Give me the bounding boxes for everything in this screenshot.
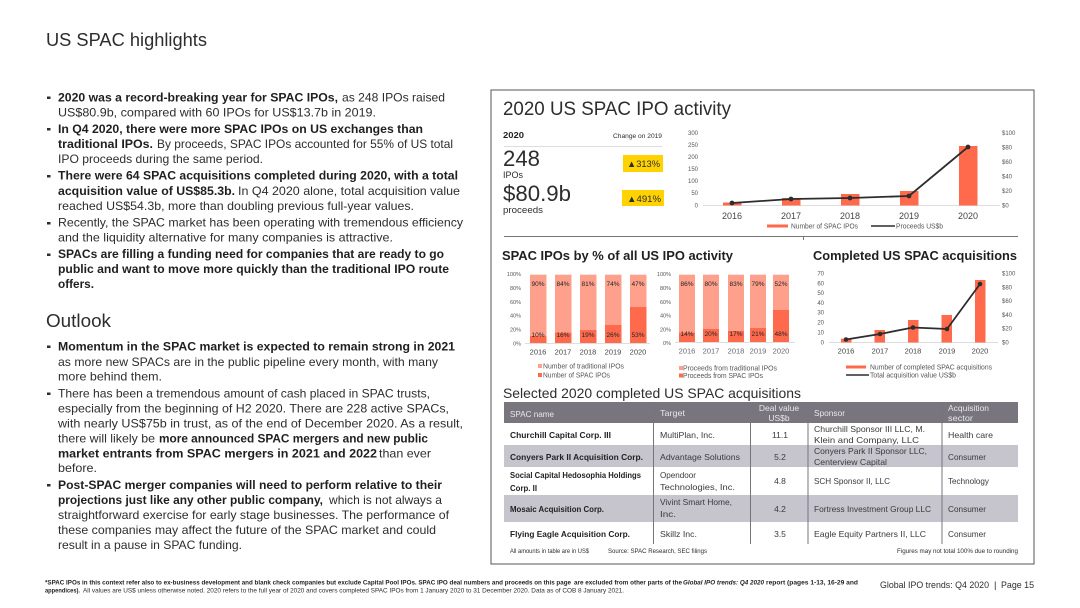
chart: SPAC IPO count and proceeds: $60 [1002,160,1013,166]
title: US SPAC highlights [46,30,207,50]
text block: highlights bullets: offers. [58,277,94,291]
chart: completed SPAC acquisitions: Number of completed SPAC acquisitions [870,364,992,372]
table: selected acquisitions: Centerview Capital [814,457,887,467]
chart: share of IPO proceeds: Proceeds from SPAC IPOs [683,373,763,380]
chart: completed SPAC acquisitions: 2017 [872,346,888,356]
table: selected acquisitions: Conyers Park II Sponsor LLC, [814,446,927,456]
text block: highlights bullets: SPACs are filling a funding need for companies that are ready to go [58,247,444,261]
table: selected acquisitions: Eagle Equity Partners II, LLC [814,529,926,539]
text block: highlights bullets: IPO proceeds during the same period. [58,152,263,166]
footnote: appendices). [45,588,80,594]
text block: outlook bullets: before. [58,461,97,475]
chart: completed SPAC acquisitions: $40 [1002,313,1013,319]
chart: SPAC IPO count and proceeds: $20 [1002,189,1013,195]
table: selected acquisitions: Mosaic Acquisition Corp. [510,504,604,514]
text block: highlights bullets: US$80.9b, compared with 60 IPOs for US$13.7b in 2019. [58,106,376,120]
table: selected acquisitions: SPAC name [510,409,554,419]
table: selected acquisitions: sector [948,413,973,423]
chart: SPAC IPO count and proceeds: $100 [1002,131,1016,137]
chart: completed SPAC acquisitions: 2018 [905,346,921,356]
text block: outlook bullets: projections just like any other public company, [58,493,323,507]
chart: share of IPO count: Number of SPAC IPOs [543,372,610,380]
table: selected acquisitions: Consumer [948,504,986,514]
page footer: Page 15 [1001,580,1034,591]
text block: highlights bullets: There were 64 SPAC acquisitions completed during 2020, with a total [58,168,458,182]
table: selected acquisitions: Acquisition [948,403,989,413]
table: selected acquisitions: Sponsor [814,408,845,418]
chart: share of IPO count: 90% [531,281,545,288]
chart: share of IPO count: 20% [510,328,521,334]
text block: outlook bullets: market entrants from SPAC mergers in 2021 and 2022 [58,446,377,460]
panel: charts and table [491,90,1034,564]
text block: outlook bullets: more announced SPAC mergers and new public [159,432,428,446]
stats: 2020 change on 2019: ▲313% [627,159,661,170]
chart: completed SPAC acquisitions: 2019 [939,346,955,356]
chart: share of IPO proceeds: 2016 [679,346,695,356]
page footer: Global IPO trends: Q4 2020 [880,580,989,591]
chart: completed SPAC acquisitions: $80 [1002,286,1013,292]
chart: share of IPO count: 2018 [580,348,596,356]
chart: share of IPO proceeds: 80% [704,281,718,288]
footnote [45,580,858,594]
stats: 2020 change on 2019: 2020 [503,131,525,140]
stats: 2020 change on 2019: $80.9b [503,181,571,206]
text block: highlights bullets [47,90,463,291]
chart: SPAC IPO count and proceeds: $40 [1002,174,1013,180]
table: selected acquisitions: 11.1 [772,430,788,440]
chart: completed SPAC acquisitions: 50 [817,291,825,297]
table: selected acquisitions: Target [660,408,686,418]
chart: share of IPO proceeds: 79% [751,281,765,288]
chart: share of IPO proceeds: 2019 [750,346,766,356]
footnote: are excluded from other parts of the [574,580,682,586]
chart: completed SPAC acquisitions: $100 [1002,272,1016,278]
table: selected acquisitions: Churchill Capital Corp. III [510,430,611,440]
text block: outlook bullets: which is not always a [328,493,442,507]
page footer: | [994,580,996,591]
chart: share of IPO proceeds: 60% [660,300,671,306]
table: selected acquisitions: 5.2 [774,452,786,462]
chart: share of IPO count [507,272,650,380]
text block: highlights bullets: acquisition value of US$85.3b. [58,184,235,198]
text block: outlook bullets: There has been a tremendous amount of cash placed in SPAC trusts, [58,386,430,400]
chart: completed SPAC acquisitions: 60 [817,282,825,288]
table: selected acquisitions: Technologies, Inc. [660,482,735,492]
text block: outlook bullets: these companies may affect the future of the SPAC market and could [58,523,436,537]
text block: outlook bullets [47,340,463,552]
stats: 2020 change on 2019: ▲491% [627,194,662,205]
chart: share of IPO count: 10% [531,332,545,339]
chart: SPAC IPO count and proceeds: 2018 [840,211,860,221]
table: selected acquisitions: US$b [768,413,790,423]
chart: share of IPO count: 19% [581,332,595,339]
table: selected acquisitions: Advantage Solutions [660,452,740,462]
chart: share of IPO proceeds: 20% [704,331,718,338]
heading: completed acquisitions: Completed US SPAC acquisitions [813,248,1017,263]
chart: completed SPAC acquisitions: $60 [1002,299,1013,305]
table: selected acquisitions: Consumer [948,452,986,462]
chart: SPAC IPO count and proceeds: $0 [1002,204,1009,210]
stats: 2020 change on 2019 [503,131,664,216]
chart: SPAC IPO count and proceeds: 0 [695,204,699,210]
chart: completed SPAC acquisitions: 40 [817,301,825,307]
chart: SPAC IPO count and proceeds: 100 [688,179,699,185]
heading: outlook: Outlook [46,311,112,331]
heading: SPAC IPOs by percent: SPAC IPOs by % of all US IPO activity [502,248,734,263]
table notes [510,548,1018,555]
footnote: *SPAC IPOs in this context refer also to ex-business development and blank check companies but exclude Capital Pool IPOs. SPAC IPO deal numbers and proceeds on this page [45,580,571,586]
chart: share of IPO count: 47% [631,281,645,288]
table notes: Source: SPAC Research, SEC filings [608,548,708,555]
chart: SPAC IPO count and proceeds: 150 [688,167,699,173]
table: selected acquisitions: 4.2 [774,504,786,514]
chart: share of IPO count: 84% [556,281,570,288]
chart: share of IPO proceeds: 2018 [728,346,744,356]
table: selected acquisitions: Social Capital Hedosophia Holdings [510,470,641,480]
text block: outlook bullets: result in a pause in SPAC funding. [58,538,242,552]
chart: share of IPO count: 81% [581,281,595,288]
chart: completed SPAC acquisitions: 70 [817,272,825,278]
table: selected acquisitions: Fortress Investment Group LLC [814,504,931,514]
table: selected acquisitions: SCH Sponsor II, LLC [814,476,890,486]
chart: share of IPO count: 80% [510,286,521,292]
chart: share of IPO proceeds: Proceeds from traditional IPOs [683,366,777,372]
table notes: Figures may not total 100% due to rounding [897,548,1018,555]
table: selected acquisitions [504,402,1018,544]
text block: highlights bullets: traditional IPOs. [58,137,153,151]
table: selected acquisitions: Inc. [660,509,676,519]
table: selected acquisitions: Technology [948,476,990,486]
chart: completed SPAC acquisitions: $20 [1002,326,1013,332]
chart: SPAC IPO count and proceeds: 2019 [899,211,919,221]
table: selected acquisitions: Opendoor [660,470,696,480]
chart: share of IPO proceeds: 2020 [773,346,789,356]
table: selected acquisitions: Skillz Inc. [660,529,697,539]
table: selected acquisitions: Vivint Smart Home, [660,497,732,507]
chart: share of IPO proceeds: 2017 [703,346,719,356]
chart: share of IPO proceeds: 17% [729,331,743,338]
chart: share of IPO proceeds: 40% [660,314,671,320]
table: selected acquisitions: Conyers Park II Acquisition Corp. [510,452,643,462]
chart: completed SPAC acquisitions: Total acquisition value US$b [870,372,956,380]
table: selected acquisitions: Corp. II [510,483,537,493]
chart: share of IPO proceeds: 0% [663,341,671,347]
chart: SPAC IPO count and proceeds: 2020 [958,211,978,221]
text block: highlights bullets: By proceeds, SPAC IPOs accounted for 55% of US total [157,137,453,151]
text block: highlights bullets: In Q4 2020 alone, total acquisition value [238,184,460,198]
chart: completed SPAC acquisitions [817,272,1016,380]
chart: share of IPO count: 2017 [555,348,571,356]
chart: share of IPO proceeds: 21% [751,331,765,338]
table: selected acquisitions: 3.5 [774,529,786,539]
chart: share of IPO count: Number of traditional IPOs [543,364,624,370]
footnote: Global IPO trends: Q4 2020 [683,580,764,586]
text block: highlights bullets: public and want to move more quickly than the traditional IPO route [58,262,449,276]
chart: share of IPO proceeds: 48% [774,331,788,338]
table: selected acquisitions: Flying Eagle Acquisition Corp. [510,529,630,539]
chart: share of IPO count: 53% [631,332,645,339]
chart: share of IPO count: 2020 [630,348,646,356]
text block: outlook bullets: Momentum in the SPAC market is expected to remain strong in 2021 [58,340,455,354]
chart: SPAC IPO count and proceeds: 2016 [722,211,742,221]
text block: outlook bullets: more behind them. [58,370,162,384]
chart: share of IPO proceeds: 86% [680,281,694,288]
stats: 2020 change on 2019: proceeds [503,205,543,216]
chart: share of IPO proceeds: 20% [660,328,671,334]
stats: 2020 change on 2019: 248 [503,146,540,171]
chart: share of IPO count: 60% [510,300,521,306]
table: selected acquisitions: 4.8 [774,476,786,486]
text block: highlights bullets: as 248 IPOs raised [342,90,445,104]
table: selected acquisitions: MultiPlan, Inc. [660,430,715,440]
text block: outlook bullets: as more new SPACs are in the public pipeline every month, with many [58,355,438,369]
chart: SPAC IPO count and proceeds: Number of SPAC IPOs [791,224,858,230]
chart: SPAC IPO count and proceeds: Proceeds US$b [896,224,943,230]
chart: SPAC IPO count and proceeds: 200 [688,155,699,161]
chart: SPAC IPO count and proceeds: 2017 [781,211,801,221]
chart: share of IPO count: 16% [556,332,570,339]
chart: share of IPO count: 0% [513,342,521,348]
chart: share of IPO proceeds: 80% [660,286,671,292]
text block: highlights bullets: 2020 was a record-breaking year for SPAC IPOs, [58,90,338,104]
table notes: All amounts in table are in US$ [510,548,589,555]
text block: highlights bullets: Recently, the SPAC market has been operating with tremendous efficiency [58,216,463,230]
chart: SPAC IPO count and proceeds [688,131,1016,230]
heading: selected acquisitions: Selected 2020 completed US SPAC acquisitions [503,385,801,401]
text block: outlook bullets: straightforward exercise for early stage businesses. The performance of [58,508,450,522]
table: selected acquisitions: Deal value [759,403,799,413]
chart: share of IPO count: 100% [507,272,521,278]
chart: share of IPO proceeds: 52% [774,281,788,288]
table: selected acquisitions: Klein and Company, LLC [814,435,919,445]
chart: completed SPAC acquisitions: 20 [817,320,825,326]
table: selected acquisitions: Health care [948,430,993,440]
chart: SPAC IPO count and proceeds: 50 [691,191,699,197]
text block: highlights bullets: In Q4 2020, there were more SPAC IPOs on US exchanges than [58,122,423,136]
text block: outlook bullets: with nearly US$75b in trust, as of the end of December 2020. As a result, [57,416,463,430]
text block: highlights bullets: reached US$54.3b, more than doubling previous full-year values. [58,199,414,213]
chart: completed SPAC acquisitions: 10 [817,330,825,336]
chart: SPAC IPO count and proceeds: $80 [1002,146,1013,152]
chart: completed SPAC acquisitions: $0 [1002,340,1009,346]
chart: SPAC IPO count and proceeds: 250 [688,143,699,149]
stats: 2020 change on 2019: Change on 2019 [613,133,662,140]
chart: share of IPO count: 2016 [530,348,546,356]
chart: share of IPO proceeds: 100% [657,272,671,278]
chart: share of IPO proceeds: 14% [680,331,694,338]
footnote: report (pages 1-13, 16-29 and [766,580,858,586]
text block: outlook bullets: there will likely be [58,432,155,446]
text block: outlook bullets: Post-SPAC merger companies will need to perform relative to their [58,478,442,492]
chart: share of IPO count: 2019 [605,348,621,356]
table: selected acquisitions: Churchill Sponsor III LLC, M. [814,424,925,434]
chart: share of IPO proceeds: 83% [729,281,743,288]
footnote: All values are US$ unless otherwise noted. 2020 refers to the full year of 2020 and covers completed SPAC IPOs from 1 January 2020 to 31 December 2020. Data as of COB 8 January 2021. [83,588,624,594]
text block: outlook bullets: than ever [379,446,431,460]
chart: share of IPO count: 74% [606,281,620,288]
chart: share of IPO proceeds [657,272,795,380]
chart: share of IPO count: 26% [606,332,620,339]
chart: completed SPAC acquisitions: 0 [821,340,825,346]
chart: completed SPAC acquisitions: 2020 [972,346,988,356]
stats: 2020 change on 2019: IPOs [503,170,523,181]
text block: outlook bullets: especially from the beginning of H2 2020. There are 228 active SPACs, [58,402,449,416]
chart: completed SPAC acquisitions: 30 [817,310,825,316]
chart: SPAC IPO count and proceeds: 300 [688,131,699,137]
chart: share of IPO count: 40% [510,314,521,320]
heading: 2020 US SPAC IPO activity: 2020 US SPAC IPO activity [503,99,731,120]
chart: completed SPAC acquisitions: 2016 [838,346,854,356]
table: selected acquisitions: Consumer [948,529,986,539]
text block: highlights bullets: and the liquidity alternative for many companies is attractive. [58,230,393,244]
